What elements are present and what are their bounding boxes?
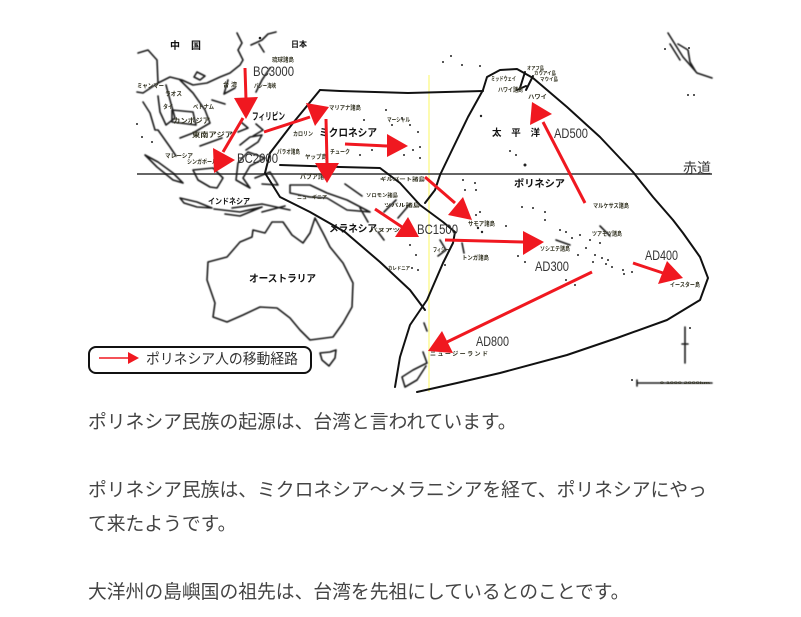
map labels: small place names: マレーシア xyxy=(165,153,193,160)
arrow: into Melanesia xyxy=(375,209,419,237)
map labels: small place names: ツアモツ諸島 xyxy=(592,230,622,238)
map labels: small place names: オアフ島 xyxy=(527,65,544,72)
map labels: major regions xyxy=(170,39,565,285)
map labels: small place names: ニューギニア xyxy=(297,195,327,201)
scattered islands xyxy=(136,37,695,381)
map labels: small place names: 0 1000 2000km xyxy=(660,380,711,385)
arrow: to New Zealand xyxy=(428,272,592,353)
date labels xyxy=(237,63,678,349)
label: AD400: AD400 xyxy=(645,247,678,263)
equator line xyxy=(137,173,712,175)
region boundaries xyxy=(265,69,708,392)
map labels: small place names: タイ xyxy=(163,103,173,111)
arrow: Marianas to New Guinea xyxy=(315,119,339,183)
text: migration route: て来たようです。 xyxy=(88,513,236,534)
legend: ポリネシア人の移動経路 xyxy=(146,351,298,368)
legend xyxy=(89,347,311,373)
yellow seam line xyxy=(428,75,430,392)
arrow: to Samoa xyxy=(425,177,472,220)
text: ancestors of island nations: 大洋州の島嶼国の祖先は、台湾を先祖にしているとのことです。 xyxy=(88,581,629,602)
map labels: small place names: 琉球諸島 xyxy=(272,56,294,64)
label: Melanesia: メラネシア xyxy=(329,223,377,235)
map labels: small place names: カレドニア xyxy=(388,265,410,272)
map labels: small place names: パラオ諸島 xyxy=(277,148,300,156)
label: Indonesia: インドネシア xyxy=(208,196,250,206)
map labels: small place names: 台湾 xyxy=(223,81,237,89)
map labels: small place names: ギルバート諸島 xyxy=(380,176,425,183)
map labels: small place names: ミッドウェイ xyxy=(491,76,516,83)
map labels: small place names: パプア諸島 xyxy=(300,173,330,181)
migration arrows xyxy=(213,68,683,353)
map labels: small place names: トンガ諸島 xyxy=(462,254,489,262)
label: Micronesia: ミクロネシア xyxy=(319,127,377,139)
map labels: small place names: ハワイ諸島 xyxy=(498,86,523,94)
label: Polynesia: ポリネシア xyxy=(514,178,565,190)
map labels: small place names: ソシエテ諸島 xyxy=(540,245,570,253)
map labels: small place names: ベトナム xyxy=(193,104,214,111)
map labels: small place names: ハワイ xyxy=(528,94,547,101)
map labels: small place names: バシー海峡 xyxy=(254,82,276,90)
label: BC1500: BC1500 xyxy=(417,221,458,237)
map labels: small place names: ミャンマー xyxy=(137,83,164,90)
label: China: 中 国 xyxy=(170,39,201,52)
text: origin of Polynesians: ポリネシア民族の起源は、台湾と言われています。 xyxy=(88,411,517,432)
arrow: across Micronesia xyxy=(345,134,408,157)
label: AD800: AD800 xyxy=(476,333,509,349)
map labels: small place names: サモア諸島 xyxy=(468,220,495,228)
label: Pacific Ocean: 太 平 洋 xyxy=(492,127,540,139)
map labels: small place names: ニュージーランド xyxy=(430,351,488,358)
arrow: Fiji to Tahiti xyxy=(445,231,544,255)
label: Philippines: フィリピン xyxy=(252,111,285,123)
arrow: Japan area to Philippines xyxy=(234,68,258,119)
text: migration route: ポリネシア民族は、ミクロネシア～メラニシアを経て、ポリネシアにやっ xyxy=(88,479,707,500)
arrow: Philippines to Borneo xyxy=(213,118,243,173)
label: Japan: 日本 xyxy=(291,39,307,49)
map labels: small place names: カロリン xyxy=(293,131,313,138)
map labels: small place names: バヌアツ xyxy=(370,228,400,234)
map labels: small place names: シンガポール xyxy=(187,158,217,166)
map labels: small place names: 東南アジア xyxy=(192,130,233,139)
label: AD300: AD300 xyxy=(535,258,569,274)
map labels: small place names: チューク xyxy=(330,148,350,156)
coastlines of Asia and islands xyxy=(137,32,712,387)
label: BC3000: BC3000 xyxy=(253,63,294,79)
label: Australia: オーストラリア xyxy=(249,273,316,285)
map labels: small place names: マーシャル xyxy=(387,117,410,124)
label: AD500: AD500 xyxy=(554,125,588,141)
map labels: small place names: マリアナ諸島 xyxy=(329,104,361,112)
map labels: small place names: ヤップ島 xyxy=(305,153,327,161)
map labels: small place names: マウイ島 xyxy=(540,76,558,83)
label: BC2000: BC2000 xyxy=(237,150,278,166)
arrow: Marquesas to Hawaii xyxy=(530,102,585,203)
map labels: small place names: カウアイ島 xyxy=(534,70,556,77)
map labels: small place names: マルケサス諸島 xyxy=(593,202,629,210)
map labels: small place names: フィジー xyxy=(433,247,449,254)
arrow: to Easter Island xyxy=(633,261,683,284)
text: migration route xyxy=(88,479,707,534)
map labels: small place names: ラオス xyxy=(165,91,182,98)
map labels: small place names: ソロモン諸島 xyxy=(366,192,398,199)
map labels: small place names: カンボジア xyxy=(173,116,210,125)
arrow: Philippines to Marianas xyxy=(264,103,329,132)
map labels: small place names: ツバル諸島 xyxy=(384,202,420,209)
label: equator: 赤道 xyxy=(683,160,711,176)
map labels: small place names xyxy=(137,56,711,385)
map labels: small place names: イースター島 xyxy=(670,281,700,289)
